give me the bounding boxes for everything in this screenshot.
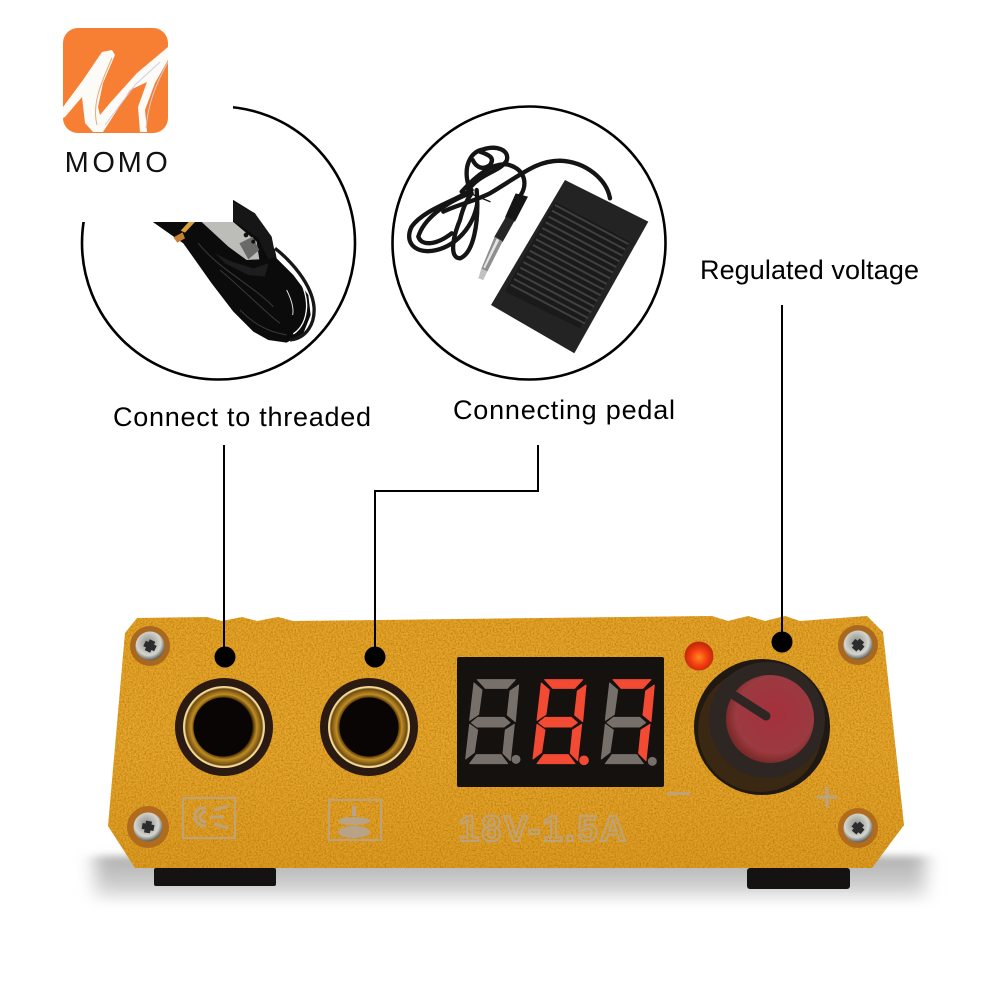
digit 3: lit 7	[601, 680, 656, 765]
pedal body	[491, 180, 648, 353]
jack: threaded output	[175, 678, 273, 776]
logo wordmark: MOMO	[65, 147, 168, 179]
jack plug	[478, 193, 528, 280]
right foot	[747, 868, 850, 889]
panel: foot pedal circle	[392, 106, 666, 380]
leader line: threaded	[214, 445, 236, 668]
cable photo: threaded clip cord	[150, 200, 314, 343]
digit 2: lit 8	[533, 680, 588, 765]
label: Connecting pedal: Connecting pedal	[453, 395, 675, 425]
label: Regulated voltage: Regulated voltage	[700, 255, 919, 285]
digital display	[457, 657, 664, 787]
screw: bottom right	[838, 808, 878, 848]
device: power supply	[95, 610, 925, 906]
digit 1: unlit	[466, 680, 520, 764]
engraved icon: clip cord	[183, 798, 235, 838]
screw: top right	[838, 625, 878, 665]
voltage knob	[694, 659, 830, 795]
knob pointer	[735, 696, 766, 716]
logo block	[0, 0, 233, 222]
power LED	[684, 642, 714, 670]
left foot	[154, 868, 276, 886]
leader line: voltage	[772, 305, 792, 652]
panel: threaded cable circle	[82, 106, 355, 380]
jack: pedal input	[320, 678, 418, 776]
logo icon: orange square with M	[63, 28, 168, 133]
engraved minus	[667, 792, 690, 795]
engraved text: 18V-1.5A: 18V-1.5A	[459, 808, 626, 849]
pedal cord	[409, 148, 610, 258]
label: Connect to threaded: Connect to threaded	[113, 402, 371, 432]
leader line: pedal	[364, 445, 538, 668]
engraved plus	[817, 787, 837, 807]
pedal photo	[409, 148, 648, 353]
front panel	[100, 610, 910, 872]
screw: top left	[130, 626, 170, 666]
engraved icon: foot switch	[329, 800, 381, 840]
screw: bottom left	[127, 806, 169, 848]
device shadow	[95, 856, 925, 906]
